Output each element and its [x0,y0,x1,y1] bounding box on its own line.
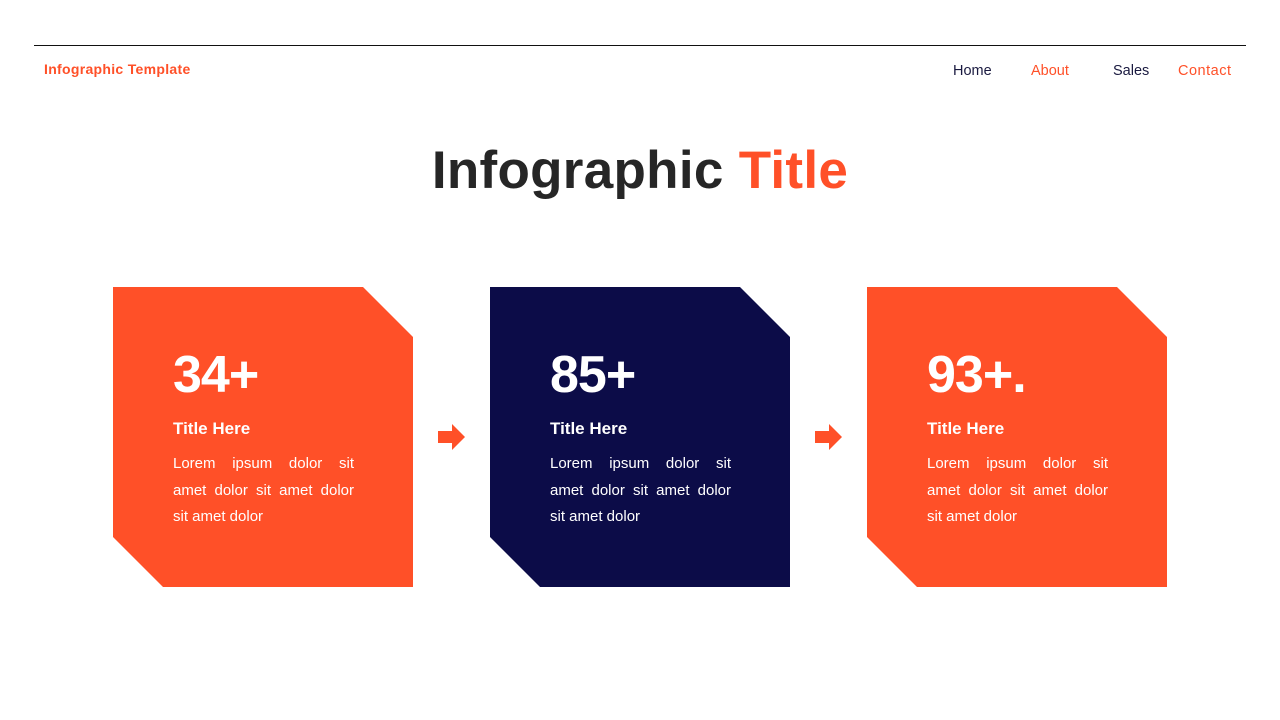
arrow 1 [438,424,465,450]
arrow 2 [815,424,842,450]
panel: card 3: Title Here [927,419,1004,438]
nav: home: Home [953,63,992,79]
panel: card 2: amet dolor sit amet dolor [550,482,731,498]
panel: card 1: 34+ [173,346,258,404]
panel: card 1: Lorem ipsum dolor sit [173,455,354,472]
panel: card 2: Lorem ipsum dolor sit [550,455,731,472]
nav: about: About [1031,63,1069,79]
panel: card 3: sit amet dolor [927,508,1017,525]
panel: card 2 [490,287,790,587]
panel: card 1: sit amet dolor [173,508,263,525]
title: Infographic Title [432,141,848,200]
panel: card 3: Lorem ipsum dolor sit [927,455,1108,472]
panel: card 3: amet dolor sit amet dolor [927,482,1108,498]
panel: card 3: 93+. [927,346,1026,404]
nav: contact: Contact [1178,63,1231,79]
panel: card 1: amet dolor sit amet dolor [173,482,354,498]
nav: sales: Sales [1113,63,1149,79]
panel: card 3 [867,287,1167,587]
panel: card 1 [113,287,413,587]
panel: card 1: Title Here [173,419,250,438]
panel: card 2: 85+ [550,346,635,404]
brand label: Infographic Template [44,61,191,77]
panel: card 2: sit amet dolor [550,508,640,525]
panel: card 2: Title Here [550,419,627,438]
